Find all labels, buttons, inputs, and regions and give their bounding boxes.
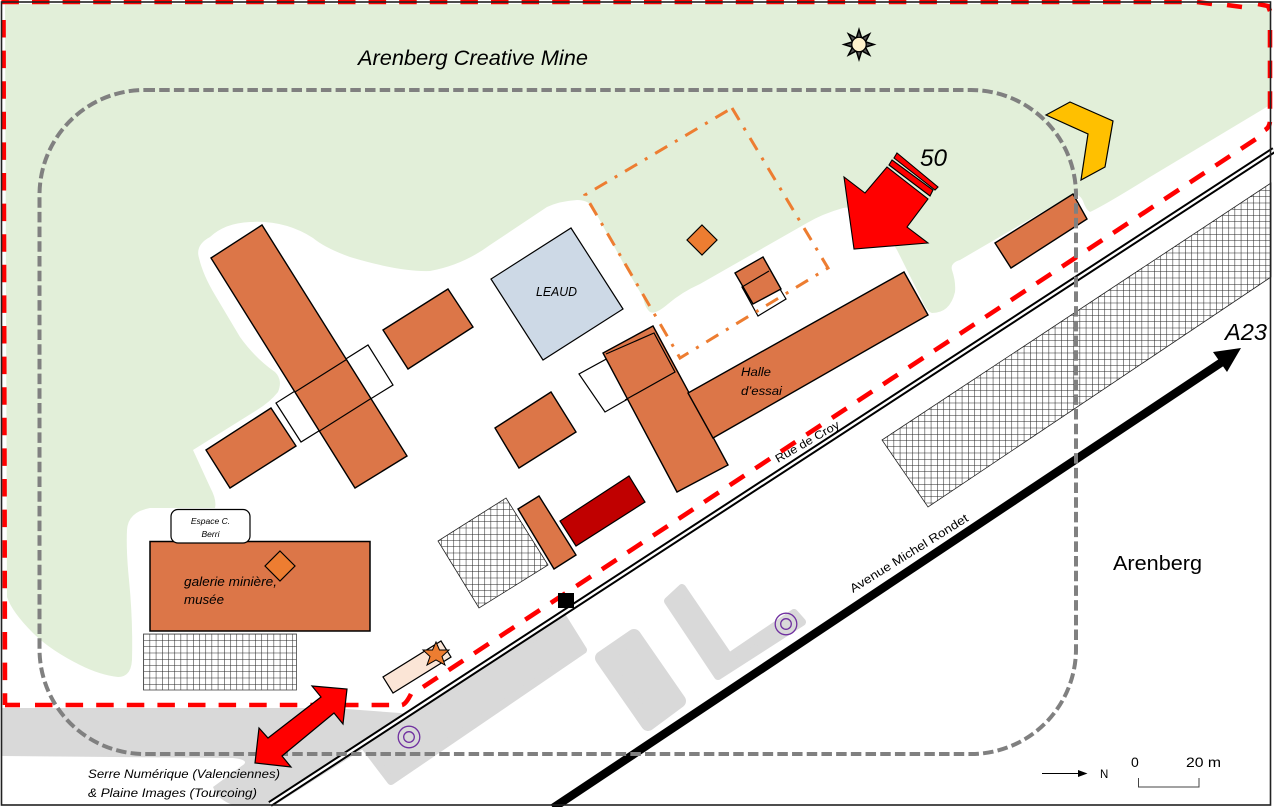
museum text second line: musée [184,593,224,607]
building: Halle d'essai [688,272,928,438]
building: centre block [495,392,576,468]
red double-headed arrow [255,686,347,767]
label: Espace C. Berri: Berri [202,529,221,539]
entrance strip with star [383,641,451,693]
label: Serre Numérique [88,767,280,800]
icon: purple target by road [398,726,420,748]
label: Espace C. Berri: Espace C. [191,516,230,526]
grey L-shaped parking [668,588,802,676]
scale bar: 0 [1131,754,1139,770]
north arrow [1042,769,1108,781]
scale bar [1131,754,1221,787]
small hatched square [438,498,548,608]
label: A23: A23 [1223,319,1267,345]
large hatched strip [882,183,1271,507]
building: small pair in orange zone [735,257,786,316]
label: 50: 50 [920,145,948,172]
icon: sun [844,30,874,60]
label: Serre Numérique: & Plaine Images (Tourcoing) [88,786,257,800]
building: south annex [206,408,296,488]
building: LEAUD: LEAUD [536,285,577,299]
grey paved access road [2,708,415,805]
icon: black square [558,593,574,608]
label: Avenue Michel Rondet: Avenue Michel Rondet [847,511,971,596]
north arrow: N [1100,769,1108,781]
building: T wing [579,326,728,492]
scale bar: 20 m [1186,754,1221,770]
label: Arenberg: Arenberg [1113,552,1202,575]
building: north annex [383,289,473,369]
grey dashed perimeter [40,90,1076,754]
building: galerie minière, musée [150,542,370,631]
icon: purple target on parking [775,613,797,635]
icon: orange diamond on museum [265,551,295,581]
yellow chevron arrow [1046,102,1113,180]
big red arrow with 50 stripes [844,153,938,249]
museum text: galerie minière, [184,575,277,589]
building: narrow shed [518,496,576,569]
label: Serre Numérique: Serre Numérique (Valenciennes) [88,767,280,781]
grey parking bar [366,618,583,781]
orange dash-dot study zone [585,108,828,358]
building: cross [211,225,407,488]
building: LEAUD [491,228,623,360]
building: north-east shed [995,194,1087,268]
building: Halle d'essai: Halle [741,367,771,379]
road: Avenue Michel Rondet with arrow to A23 [553,348,1241,807]
icon: orange star [423,642,449,665]
hatched rectangle by museum [144,634,296,690]
label: Rue de Croy: Rue de Croy [774,419,842,466]
building: dark red shed [560,476,645,546]
icon: orange diamond in zone [687,225,717,255]
label: Espace C. Berri [171,510,250,543]
road: Rue de Croy [270,150,1274,804]
grey parking block [602,636,679,724]
title: Arenberg Creative Mine: Arenberg Creative Mine [356,47,588,70]
building: Halle d'essai: d’essai [741,386,782,398]
